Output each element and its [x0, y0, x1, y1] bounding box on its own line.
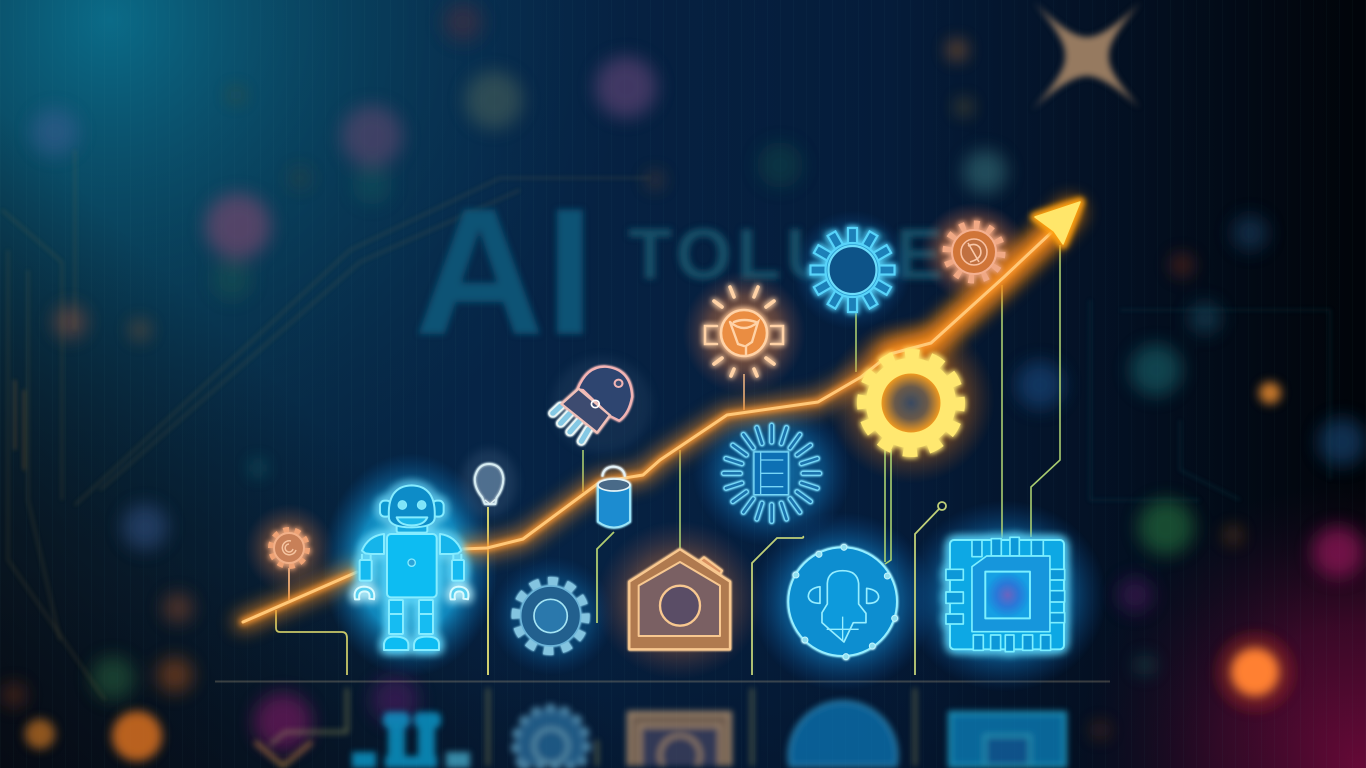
- connector trace: pin: [915, 502, 946, 675]
- four-point star: [1032, 2, 1141, 110]
- connector stem: top orange gear to chip: [1001, 285, 1003, 538]
- icon: top orange gear: [947, 225, 1001, 279]
- icon: chip sunburst: [722, 423, 822, 523]
- icon: gold gear: [864, 356, 958, 450]
- icon: cylinder can: [598, 467, 630, 527]
- reflection: round robot: [789, 702, 897, 766]
- reflection: star: [255, 742, 312, 766]
- blurred background title: AI: AI: [414, 171, 595, 373]
- icon: light bulb: [475, 464, 503, 504]
- connector stem: bulb: [487, 507, 489, 675]
- icon: top blue gear: [810, 228, 894, 312]
- connector trace: arrow to chip: [1031, 245, 1060, 537]
- faint circuit traces: [2, 150, 1330, 700]
- reflections below the floor: [255, 688, 1065, 768]
- reflection: gear: [515, 708, 587, 766]
- icon: jellyfish chip: [553, 367, 632, 441]
- blurred background title: tools: TOLUSE: [628, 215, 949, 295]
- bright orange lights: [25, 382, 1295, 761]
- connector stem: jellyfish: [582, 450, 584, 492]
- icon: house: [629, 549, 730, 649]
- icon: small orange gear: [271, 530, 307, 566]
- connector trace: left: [276, 610, 347, 675]
- connector stems: gold gear to round robot: [885, 450, 891, 564]
- connector stem: small gear: [288, 568, 290, 600]
- icon: round robot in circle: [788, 544, 898, 660]
- icon: blue gear lower: [516, 581, 585, 651]
- reflection: chip: [950, 713, 1065, 766]
- connector stem: sun icon: [743, 374, 745, 410]
- connector stem: top blue gear: [855, 313, 857, 372]
- icon: robot: [355, 485, 468, 650]
- connector trace: hook: [752, 536, 803, 675]
- icon: circuit chip: [946, 537, 1065, 652]
- reflection: house: [629, 713, 730, 766]
- floor line: [215, 680, 1110, 682]
- icon glow halos: [244, 202, 1107, 692]
- connector stem: house: [679, 450, 681, 548]
- reflection: robot: [352, 712, 470, 768]
- connector trace: can: [597, 532, 614, 623]
- reflection: connector traces: [270, 688, 915, 766]
- icon: sun with shield: [705, 287, 783, 376]
- rising growth line with arrow: [243, 202, 1080, 622]
